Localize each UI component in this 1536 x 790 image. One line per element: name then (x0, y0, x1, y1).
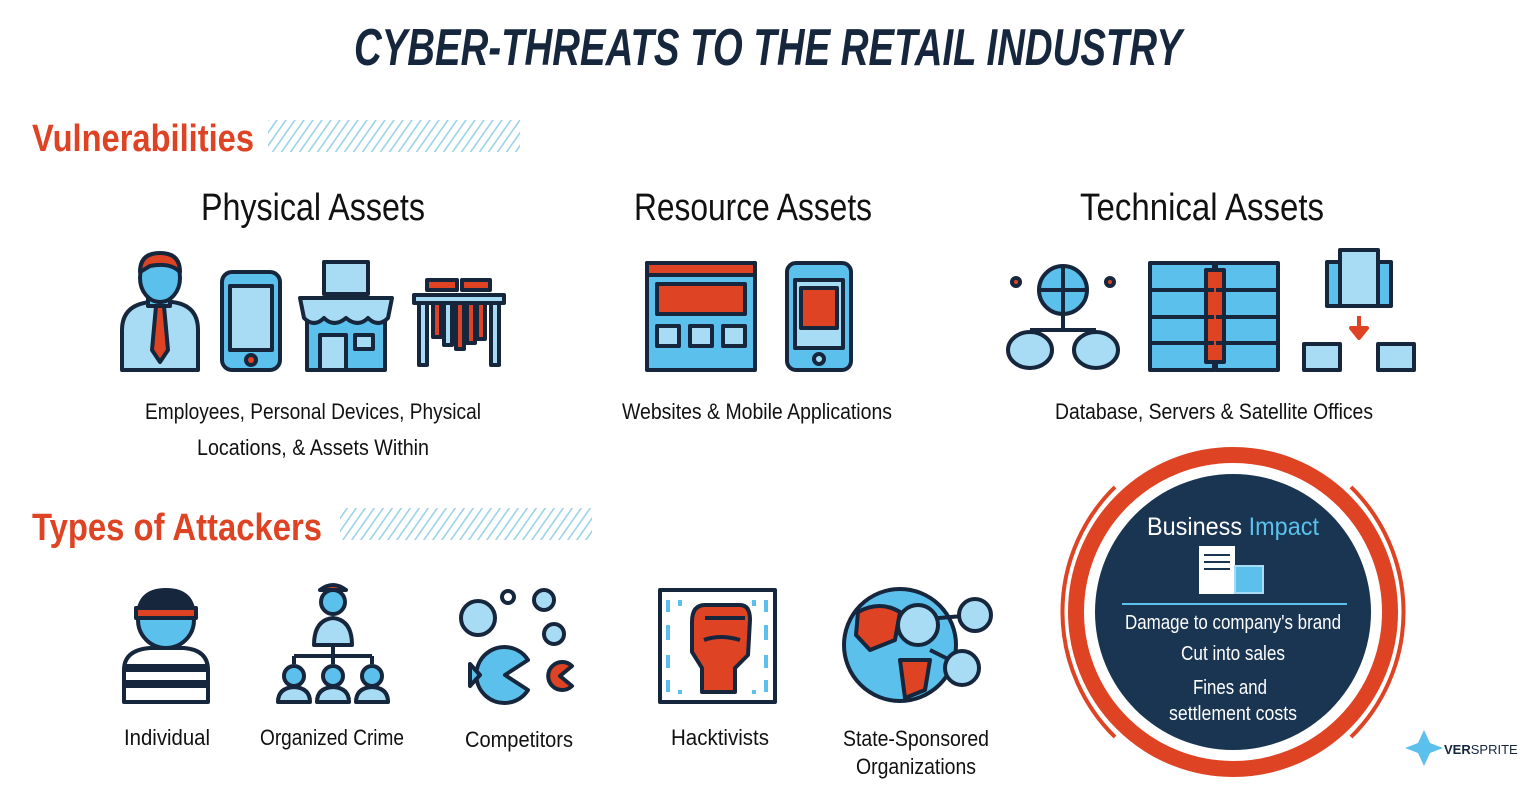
icons: technical assets (1008, 250, 1414, 370)
heading: Resource Assets: Resource Assets (634, 187, 872, 229)
icon: mobile app (787, 263, 851, 370)
caption: technical: Database, Servers & Satellite Offices (1055, 399, 1373, 424)
impact list (1125, 612, 1341, 725)
icons: physical assets (122, 253, 504, 370)
attacker icons (124, 585, 991, 703)
icons: resource assets (647, 263, 851, 370)
attacker captions: Competitors (465, 727, 573, 752)
attacker captions: Organizations (856, 754, 976, 779)
icon: individual (124, 590, 208, 702)
impact list: settlement costs (1169, 703, 1297, 725)
attacker captions: Hacktivists (671, 725, 769, 750)
attacker captions (124, 725, 989, 779)
title: CYBER-THREATS TO THE RETAIL INDUSTRY (354, 19, 1185, 77)
logo: versprite: VERSPRITE (1444, 742, 1518, 757)
text: Locations, & Assets Within (197, 435, 429, 460)
icon: hacktivists (660, 590, 775, 702)
caption: resource: Websites & Mobile Applications (622, 399, 892, 424)
icon: phone (222, 272, 280, 370)
impact list: Damage to company's brand (1125, 612, 1341, 634)
heading: Types of Attackers: Types of Attackers (32, 507, 322, 549)
icon: satellite offices (1304, 250, 1414, 370)
heading: Vulnerabilities: Vulnerabilities (32, 118, 254, 160)
heading: Technical Assets: Technical Assets (1080, 187, 1324, 229)
icon: state-sponsored (844, 589, 991, 701)
icon: competitors (461, 590, 572, 703)
heading: Physical Assets: Physical Assets (201, 187, 425, 229)
icon: network databases (1008, 266, 1118, 368)
icon: website (647, 263, 755, 370)
business impact circle (1062, 455, 1404, 769)
heading: Vulnerabilities (32, 118, 520, 160)
icon: employee (122, 253, 198, 370)
heading: Types of Attackers (32, 507, 592, 549)
caption: physical: Employees, Personal Devices, Physical (145, 399, 481, 424)
icon: clothes rack (414, 280, 504, 365)
icon: organized crime (278, 585, 388, 702)
impact list: Fines and (1193, 677, 1267, 699)
icon: servers (1150, 263, 1278, 370)
logo: versprite (1405, 730, 1518, 766)
attacker captions: Organized Crime (260, 725, 404, 750)
icon: store (300, 262, 392, 370)
icon: building (1200, 547, 1263, 593)
impact list: Cut into sales (1181, 643, 1285, 665)
heading: Business Impact: Business Impact (1147, 513, 1319, 541)
attacker captions: Individual (124, 725, 210, 750)
attacker captions: State-Sponsored (843, 726, 989, 751)
